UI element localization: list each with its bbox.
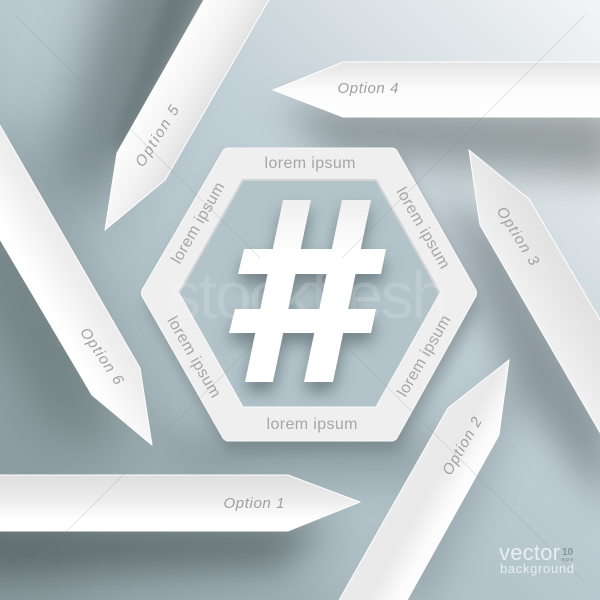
logo: version number: 10 <box>562 547 573 558</box>
label: option 3: Option 3 <box>493 204 543 269</box>
label: option 6: Option 6 <box>76 325 127 389</box>
label: option 4: Option 4 <box>338 80 398 97</box>
logo: vector: vector <box>499 540 560 565</box>
icon: hash symbol <box>229 200 386 382</box>
label: option 5: Option 5 <box>132 102 183 170</box>
arrow: option 4 <box>273 62 600 117</box>
label: upper right: lorem ipsum <box>392 185 453 272</box>
brand logo <box>499 540 574 576</box>
hexagon inner top edge shade <box>179 180 440 293</box>
label: option 1: Option 1 <box>224 495 284 512</box>
label: lower left: lorem ipsum <box>163 314 224 401</box>
label: upper left: lorem ipsum <box>168 180 229 267</box>
label: lower right: lorem ipsum <box>394 313 455 400</box>
arrow: option 1 <box>0 475 360 531</box>
logo: background: background <box>500 561 574 576</box>
watermark text: stockfresh <box>168 258 448 332</box>
arrow: option 2 <box>338 360 509 600</box>
hexagon inner panel <box>179 180 440 407</box>
label: bottom: lorem ipsum <box>266 416 358 433</box>
hexagon frame <box>142 148 476 441</box>
arrow: option 6 <box>0 122 152 445</box>
arrow: option 5 <box>105 0 270 230</box>
hexagon frame shadow <box>146 160 480 452</box>
label: option 2: Option 2 <box>439 414 486 478</box>
arrow: option 3 <box>469 150 600 436</box>
hash shadow <box>229 210 386 392</box>
logo: eps: eps <box>562 557 573 563</box>
label: top: lorem ipsum <box>264 155 356 172</box>
